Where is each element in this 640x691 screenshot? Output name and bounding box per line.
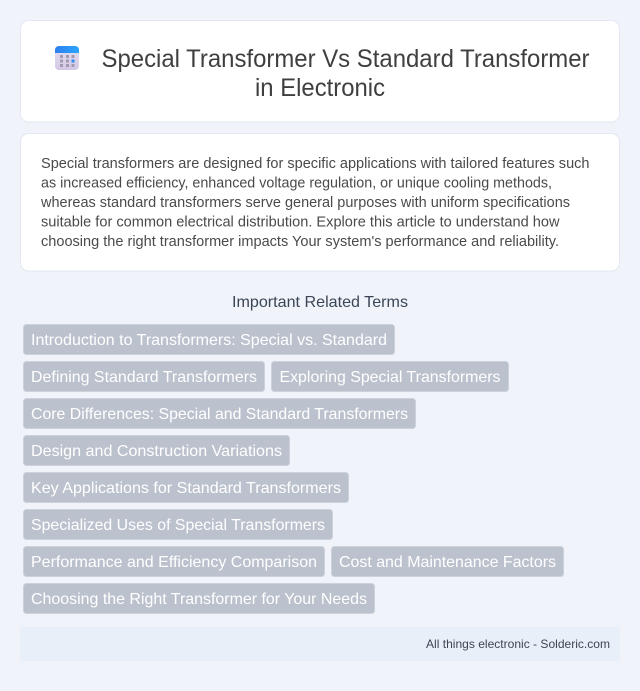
- tag: exploring special: [272, 362, 508, 392]
- tag: core differences: Core Differences: Special and Standard Transformers: [31, 406, 408, 423]
- tag: introduction: Introduction to Transformers: Special vs. Standard: [31, 332, 387, 349]
- icon: calendar: [55, 46, 79, 70]
- text block: description: as increased efficiency, enhanced voltage regulation, or unique cooling methods,: [41, 176, 552, 192]
- tag: specialized uses: [24, 510, 332, 540]
- panel: description: [20, 134, 620, 271]
- title: in Electronic: [255, 74, 385, 102]
- tag: introduction: [24, 324, 394, 354]
- tag: design and construction: [24, 436, 290, 466]
- heading: important related terms: Important Related Terms: [232, 294, 408, 311]
- tag: choosing: [24, 584, 374, 614]
- tag: performance: Performance and Efficiency Comparison: [31, 554, 317, 571]
- tag: choosing: Choosing the Right Transformer for Your Needs: [31, 591, 367, 608]
- tag: core differences: [24, 398, 416, 428]
- tag: specialized uses: Specialized Uses of Special Transformers: [31, 517, 325, 534]
- title: [102, 45, 590, 102]
- tag: key applications: [24, 472, 348, 502]
- tag: defining standard: Defining Standard Transformers: [31, 369, 257, 386]
- text block: description: whereas standard transformers serve general purposes with uniform specifications: [40, 195, 570, 211]
- tag: performance: [24, 546, 324, 576]
- text block: description: suitable for common electrical distribution. Explore this article to understand how: [41, 214, 560, 230]
- tag: design and construction: Design and Construction Variations: [31, 443, 282, 460]
- tag: defining standard: [24, 362, 264, 392]
- tag: exploring special: Exploring Special Transformers: [280, 369, 500, 386]
- text block: description: choosing the right transformer impacts Your system's performance and reliability.: [41, 234, 559, 250]
- text block: description: Special transformers are designed for specific applications with tailored features such: [41, 156, 590, 172]
- tag list: [24, 324, 564, 614]
- footer: [20, 627, 620, 661]
- tag: key applications: Key Applications for Standard Transformers: [31, 480, 341, 497]
- title: Special Transformer Vs Standard Transformer: [102, 45, 590, 73]
- panel: title card: [20, 20, 620, 122]
- tag: cost and maintenance: [332, 546, 564, 576]
- footer: All things electronic - Solderic.com: [426, 637, 610, 651]
- text block: description: [40, 156, 589, 250]
- tag: cost and maintenance: Cost and Maintenance Factors: [339, 554, 556, 571]
